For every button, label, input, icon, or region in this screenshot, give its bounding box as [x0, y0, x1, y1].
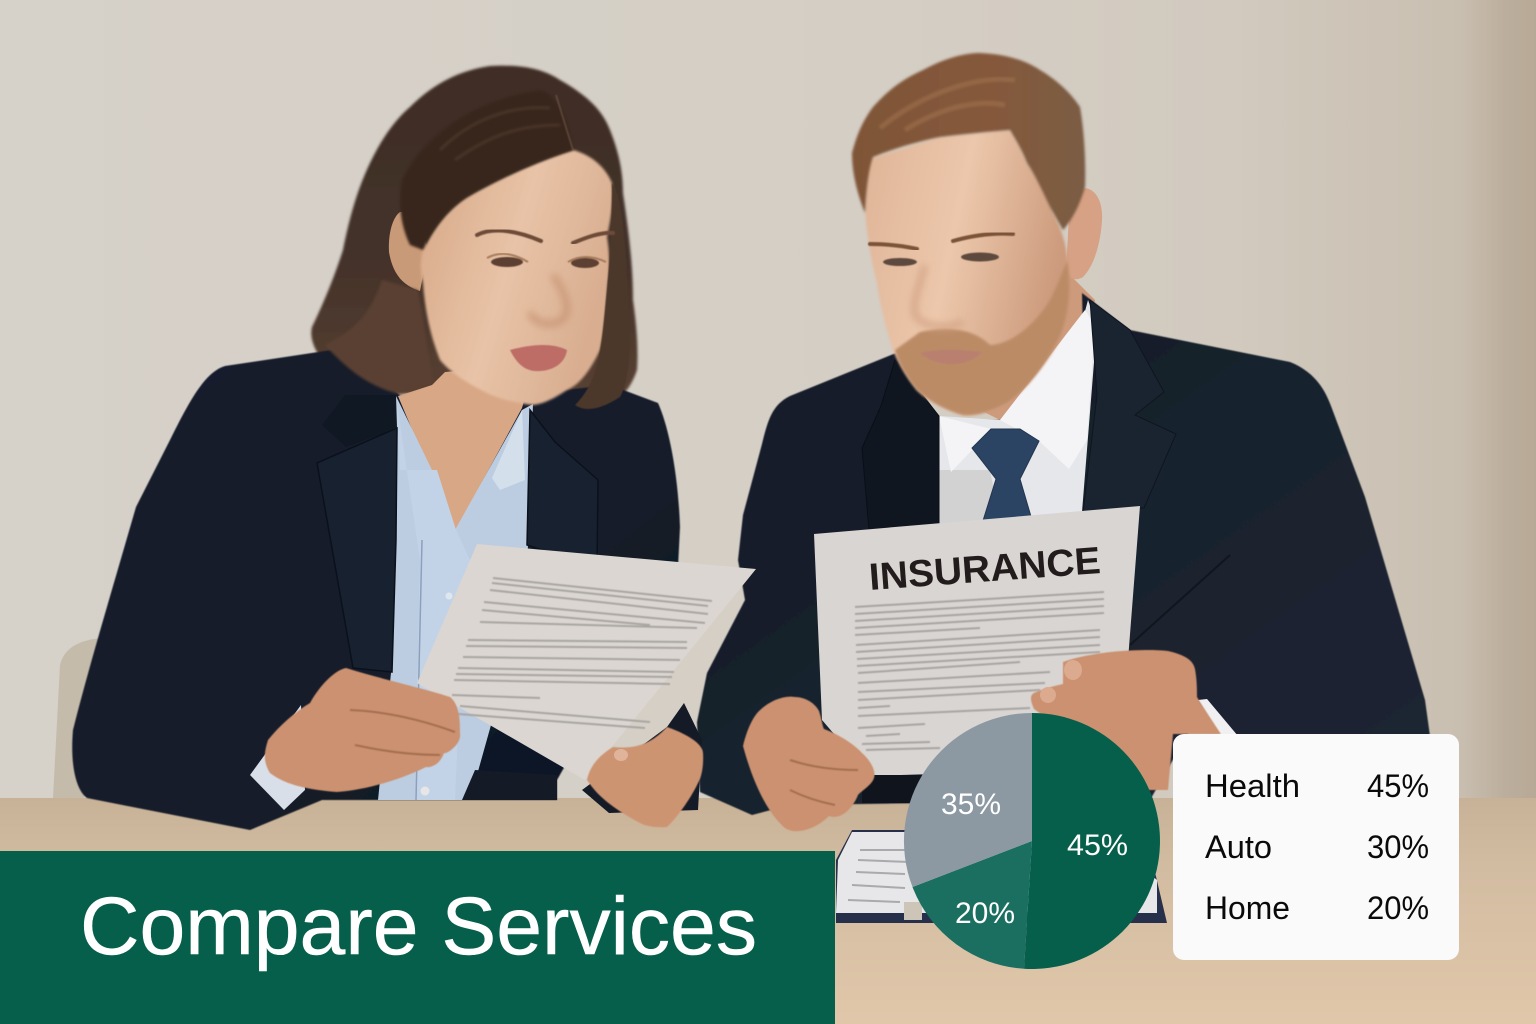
- title banner: [0, 851, 835, 1024]
- woman right hand: [265, 668, 460, 792]
- man brows: [870, 234, 1013, 249]
- man hair highlight: [880, 79, 1015, 130]
- man left hand: [743, 697, 874, 831]
- man pocket seam: [1130, 555, 1230, 645]
- slice label: 20 percent: 20%: [955, 897, 1015, 930]
- man tie: [972, 429, 1039, 524]
- woman lips: [510, 345, 567, 371]
- legend row: home: [1205, 890, 1429, 926]
- woman right lapel: [527, 410, 598, 568]
- man nose: [914, 265, 963, 327]
- woman jacket: [72, 348, 680, 830]
- man document: [814, 506, 1140, 776]
- legend row: health: [1205, 768, 1429, 804]
- woman hair sheen: [440, 108, 560, 160]
- title text: Compare Services: [80, 881, 757, 972]
- man jacket: [697, 293, 1430, 815]
- woman lower sleeve: [582, 703, 702, 813]
- man hair: [852, 53, 1085, 230]
- woman hair parting: [556, 95, 573, 150]
- slice: 20 percent: [912, 841, 1032, 969]
- woman hair lock left: [325, 280, 433, 394]
- man right hand: [1031, 650, 1221, 790]
- woman jacket lower front: [462, 770, 557, 800]
- man shirt shadow: [939, 470, 1000, 526]
- woman neck and chest: [398, 370, 530, 532]
- man lips: [920, 350, 982, 364]
- woman blouse: [378, 396, 533, 800]
- woman brows: [477, 231, 613, 243]
- document text lines: [855, 592, 1104, 750]
- legend row: auto: [1205, 829, 1429, 865]
- man collar: [939, 310, 1095, 472]
- man cuff: [1198, 699, 1238, 736]
- slice label: 35 percent: 35%: [941, 788, 1001, 821]
- wall background: [0, 0, 1536, 800]
- chair back: [53, 638, 104, 798]
- woman finger details: [350, 710, 455, 755]
- legend row: health: Health: [1205, 768, 1300, 804]
- woman document: [417, 544, 756, 780]
- dark gap below document: [862, 775, 922, 803]
- woman hair front: [400, 90, 573, 250]
- slice label: 45 percent: 45%: [1067, 829, 1128, 862]
- woman hair right: [575, 183, 630, 409]
- man left lapel: [862, 360, 939, 530]
- man fingernails: [1040, 660, 1082, 703]
- man eyes: [883, 252, 999, 266]
- man right lapel: [1083, 300, 1176, 512]
- man shirt: [939, 300, 1097, 526]
- woman face: [421, 150, 613, 405]
- man beard: [895, 262, 1069, 415]
- legend row: auto: Auto: [1205, 829, 1272, 865]
- woman upper lapel: [322, 395, 397, 447]
- clipboard on desk: [836, 830, 1167, 923]
- man ear: [1066, 188, 1102, 279]
- woman cuff: [250, 705, 305, 810]
- legend row: home: 20%: [1367, 890, 1429, 926]
- woman nose: [530, 275, 567, 324]
- person: man: [697, 53, 1430, 831]
- document heading: INSURANCE: [868, 540, 1102, 599]
- woman left hand: [587, 727, 703, 827]
- man left finger lines: [790, 760, 858, 805]
- legend row: auto: 30%: [1367, 829, 1429, 865]
- woman left lapel: [317, 428, 397, 672]
- woman ear: [389, 212, 428, 291]
- desk: [0, 798, 1536, 1024]
- slice: 35 percent: [904, 713, 1032, 887]
- legend card: [1173, 734, 1459, 960]
- pie chart: [904, 713, 1160, 969]
- woman eyes: [487, 254, 606, 268]
- person: woman: [72, 66, 680, 830]
- legend row: health: 45%: [1367, 768, 1429, 804]
- woman fingernail: [614, 749, 628, 761]
- woman hair back: [311, 66, 638, 412]
- slice: 45 percent: [1024, 713, 1160, 969]
- man face: [865, 130, 1070, 415]
- legend row: home: Home: [1205, 890, 1290, 926]
- man neck: [960, 270, 1095, 420]
